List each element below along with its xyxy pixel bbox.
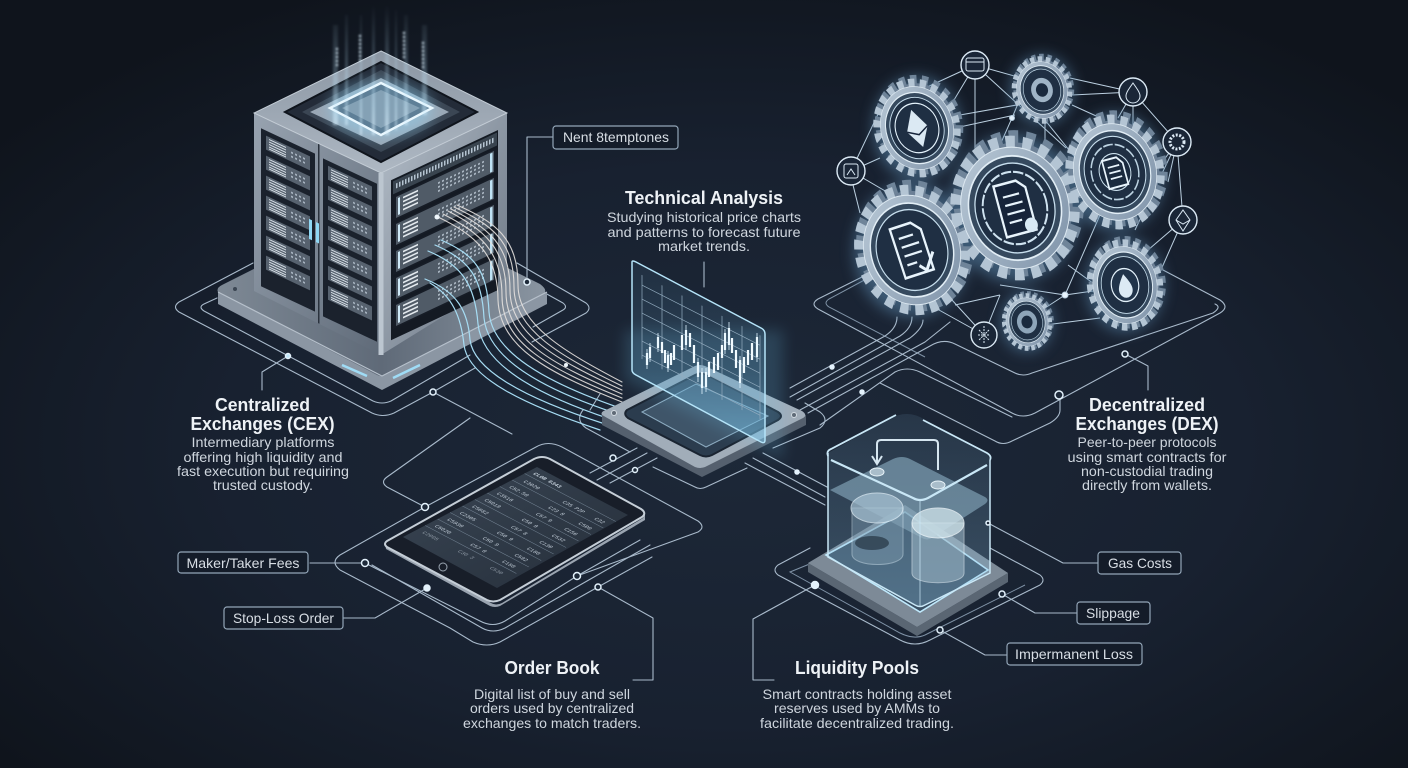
order rows: C150	[500, 560, 518, 569]
heading: decentralized exchanges	[1076, 395, 1219, 434]
text: liquidity pools description: facilitate decentralized trading.	[760, 715, 954, 731]
glass box front	[827, 415, 991, 606]
glass box back	[828, 414, 990, 607]
text: CEX description	[177, 434, 349, 493]
callout: Slippage	[1077, 602, 1150, 624]
pipes	[870, 468, 945, 489]
order rows: C5082	[470, 505, 491, 516]
right face of tower	[381, 113, 507, 355]
text: DEX description: using smart contracts for	[1068, 449, 1227, 465]
order rows: C52.50	[507, 485, 531, 498]
order rows: C35 P2P	[560, 500, 588, 515]
gear: lower right drop	[1083, 235, 1169, 332]
swap arrow	[872, 440, 938, 470]
gear: central contract	[940, 123, 1093, 287]
order rows: C5018	[482, 498, 503, 509]
callout: Nent 8temptones: Nent 8temptones	[563, 129, 669, 145]
right cylinder	[912, 508, 964, 583]
text: order book description: Digital list of buy and sell	[474, 686, 630, 702]
panel: centralized exchange server	[218, 5, 547, 390]
left face of tower	[254, 113, 381, 355]
order rows: C530	[487, 566, 506, 576]
connector nodes	[286, 279, 1128, 633]
order rows: C57 9	[533, 512, 554, 523]
platform	[602, 365, 806, 477]
text: order book description: exchanges to match traders.	[463, 715, 641, 731]
candlesticks	[647, 328, 757, 388]
order rows: C50 9	[480, 536, 501, 547]
order rows: C582	[512, 553, 530, 563]
panel: DEX smart contract gears	[837, 50, 1197, 352]
callout: Stop-Loss Order: Stop-Loss Order	[233, 610, 334, 626]
order rows: C130	[537, 540, 555, 550]
callout: Stop-Loss Order	[224, 607, 343, 629]
heading: decentralized exchanges: Decentralized	[1089, 395, 1205, 415]
heading: technical analysis: Technical Analysis	[625, 188, 783, 208]
order rows: C2005	[420, 531, 441, 542]
order rows: C532	[549, 534, 567, 543]
order rows: C2305	[457, 511, 478, 522]
top face of tower	[254, 51, 507, 173]
order rows: C5930	[445, 518, 466, 529]
callout: Nent 8temptones	[553, 126, 678, 149]
callout: Gas Costs	[1098, 552, 1181, 574]
text: technical analysis description: and patterns to forecast future	[608, 224, 801, 240]
plate	[808, 505, 1008, 636]
heading: order book: Order Book	[504, 658, 600, 678]
data light beams	[333, 5, 427, 135]
text: DEX description: directly from wallets.	[1082, 477, 1212, 493]
order rows: C156	[562, 527, 580, 537]
heading: centralized exchanges	[190, 395, 335, 434]
text: liquidity pools description: reserves used by AMMs to	[774, 700, 940, 716]
gear: small bottom	[1000, 290, 1056, 352]
order rows: C50 8	[519, 518, 540, 529]
text: technical analysis description	[607, 209, 801, 254]
holographic chart panel	[632, 261, 765, 443]
order rows: C180	[524, 547, 543, 556]
order rows: C3020	[521, 480, 543, 491]
chart panel glow	[625, 330, 783, 460]
heading: liquidity pools: Liquidity Pools	[795, 658, 919, 678]
callout: Impermanent Loss: Impermanent Loss	[1015, 646, 1133, 662]
gear: ethereum	[865, 69, 972, 183]
text: CEX description: trusted custody.	[213, 477, 313, 493]
order rows: C3518	[494, 492, 515, 503]
order rows: C23 8	[546, 506, 567, 517]
text: DEX description: Peer-to-peer protocols	[1078, 434, 1216, 450]
text: order book description: orders used by centralized	[470, 700, 634, 716]
text: DEX description: non-custodial trading	[1081, 463, 1213, 479]
order rows: C30 3	[455, 549, 476, 560]
order rows: C5020	[432, 524, 454, 535]
data cables from server to chart platform	[425, 205, 622, 430]
text: order book description	[463, 686, 641, 731]
connector lines: network of circuit traces	[176, 137, 1225, 680]
order rows: C57 0	[468, 543, 489, 554]
text: technical analysis description: market trends.	[658, 238, 750, 254]
order rows: C50 9	[494, 531, 515, 542]
gear: contract check	[843, 172, 984, 323]
gear: small top	[1007, 50, 1079, 127]
panel: technical analysis platform and chart	[602, 261, 806, 477]
text: technical analysis description: Studying historical price charts	[607, 209, 801, 225]
order rows: C57 8	[509, 525, 530, 536]
order rows: C500	[576, 521, 595, 531]
callout: Maker/Taker Fees: Maker/Taker Fees	[186, 555, 300, 571]
text: CEX description: fast execution but requiring	[177, 463, 349, 479]
callout: Maker/Taker Fees	[178, 552, 308, 573]
heading: decentralized exchanges: Exchanges (DEX)	[1076, 414, 1219, 434]
text: DEX description	[1068, 434, 1227, 493]
water surface	[830, 457, 988, 540]
panel: order book tablet	[385, 457, 645, 607]
base plate	[218, 205, 547, 390]
text: CEX description: offering high liquidity and	[184, 449, 342, 465]
text: liquidity pools description	[760, 686, 954, 731]
text: liquidity pools description: Smart contracts holding asset	[762, 686, 952, 702]
text: CEX description: Intermediary platforms	[192, 434, 334, 450]
network links	[851, 65, 1183, 335]
order rows: C32	[592, 517, 607, 525]
gear: database contract	[1057, 105, 1176, 235]
callout: Gas Costs: Gas Costs	[1108, 555, 1172, 571]
callout: Impermanent Loss	[1007, 643, 1142, 665]
glow behind gears	[854, 55, 1165, 352]
left cylinder	[851, 493, 903, 564]
node icons	[837, 51, 1197, 348]
callout: Slippage: Slippage	[1086, 605, 1140, 621]
heading: centralized exchanges: Exchanges (CEX)	[190, 414, 335, 434]
heading: centralized exchanges: Centralized	[215, 395, 310, 415]
order rows: CLOB 0343	[531, 472, 564, 489]
panel: liquidity pools glass container	[808, 414, 1008, 636]
order rows	[415, 469, 624, 579]
